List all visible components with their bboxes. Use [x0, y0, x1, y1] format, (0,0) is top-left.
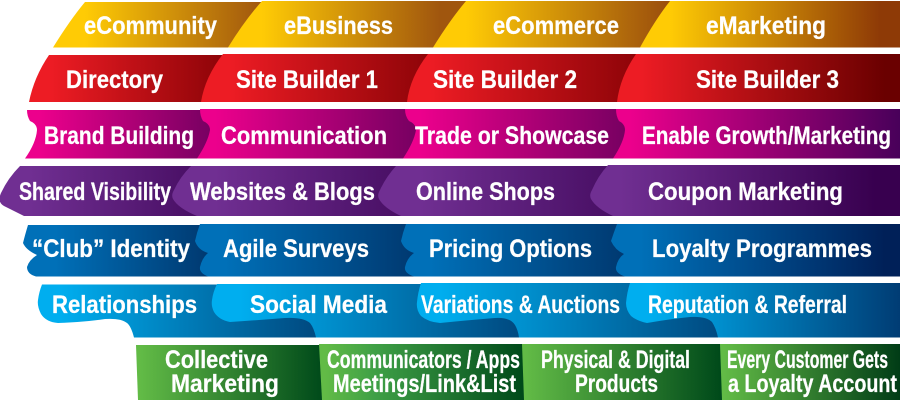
row 7: solutions [136, 344, 900, 400]
segment: eCommunity: eCommunity [84, 12, 217, 40]
segment: Communication: Communication [221, 122, 387, 150]
segment: Online Shops: Online Shops [416, 178, 555, 206]
segment: Agile Surveys: Agile Surveys [223, 235, 369, 263]
segment: Coupon Marketing: Coupon Marketing [648, 178, 843, 206]
segment: Brand Building: Brand Building [44, 122, 194, 150]
row 6: outcomes [38, 283, 900, 338]
segment: Variations & Auctions [417, 283, 730, 338]
segment: Trade or Showcase: Trade or Showcase [415, 122, 609, 150]
segment: Online Shops [378, 166, 630, 216]
segment: Communicators / Apps [319, 344, 540, 400]
segment: Shared Visibility: Shared Visibility [19, 178, 171, 206]
segment: Agile Surveys [195, 224, 440, 276]
segment: Shared Visibility [0, 166, 215, 216]
segment: Physical & Digital Products: Physical & Digital [541, 346, 690, 374]
segment: Social Media [212, 284, 530, 338]
segment: eMarketing [640, 1, 900, 48]
segment: eCommunity [53, 2, 290, 48]
row 5: engagement [23, 224, 900, 276]
segment: Relationships: Relationships [52, 291, 197, 319]
row 2: site builders [29, 54, 900, 102]
segment: eCommerce [433, 1, 690, 48]
segment: Websites & Blogs [172, 166, 420, 216]
row 3: purpose [25, 109, 900, 158]
segment: Communicators / Apps: Meetings/Link&List [333, 370, 517, 398]
segment: Physical & Digital Products: Products [575, 370, 658, 398]
segment: Relationships [38, 284, 330, 338]
segment: Trade or Showcase [403, 109, 650, 158]
segment: eMarketing: eMarketing [706, 12, 826, 40]
segment: Pricing Options: Pricing Options [429, 235, 592, 263]
segment: Communicators / Apps: Communicators / Apps [327, 346, 520, 374]
row 4: visibility [0, 165, 900, 216]
segment: Loyalty Programmes: Loyalty Programmes [652, 235, 872, 263]
segment: Loyalty Programmes [611, 224, 900, 276]
segment: Websites & Blogs: Websites & Blogs [190, 178, 375, 206]
segment: Collective Marketing: Marketing [171, 370, 279, 398]
segment: Club Identity [23, 225, 230, 276]
segment: Collective Marketing [136, 345, 340, 400]
segment: Collective Marketing: Collective [165, 346, 268, 374]
segment: eCommerce: eCommerce [493, 12, 619, 40]
segment: Every Customer Gets a Loyalty Account [720, 344, 900, 400]
segment: Site Builder 1: Site Builder 1 [236, 66, 378, 94]
segment: Site Builder 3 [617, 54, 900, 102]
segment: Enable Growth/Marketing [613, 109, 900, 158]
segment: eBusiness [228, 1, 490, 48]
segment: Variations & Auctions: Variations & Auctions [421, 291, 620, 319]
segment: Site Builder 1 [201, 54, 450, 102]
row 1: business type [53, 1, 900, 48]
segment: Coupon Marketing [590, 165, 900, 216]
segment: Pricing Options [401, 224, 650, 276]
segment: Directory: Directory [66, 66, 163, 94]
segment: Directory [29, 55, 250, 102]
segment: Physical & Digital Products [522, 344, 740, 400]
segment: Site Builder 2: Site Builder 2 [433, 66, 577, 94]
segment: Brand Building [25, 110, 230, 158]
segment: Reputation & Referral: Reputation & Referral [648, 291, 847, 319]
segment: Communication [197, 109, 440, 158]
segment: Club Identity: “Club” Identity [32, 235, 190, 263]
segment: Site Builder 2 [407, 54, 660, 102]
segment: Site Builder 3: Site Builder 3 [696, 66, 839, 94]
segment: Reputation & Referral [626, 283, 900, 338]
segment: Social Media: Social Media [250, 291, 388, 319]
segment: eBusiness: eBusiness [284, 12, 393, 40]
